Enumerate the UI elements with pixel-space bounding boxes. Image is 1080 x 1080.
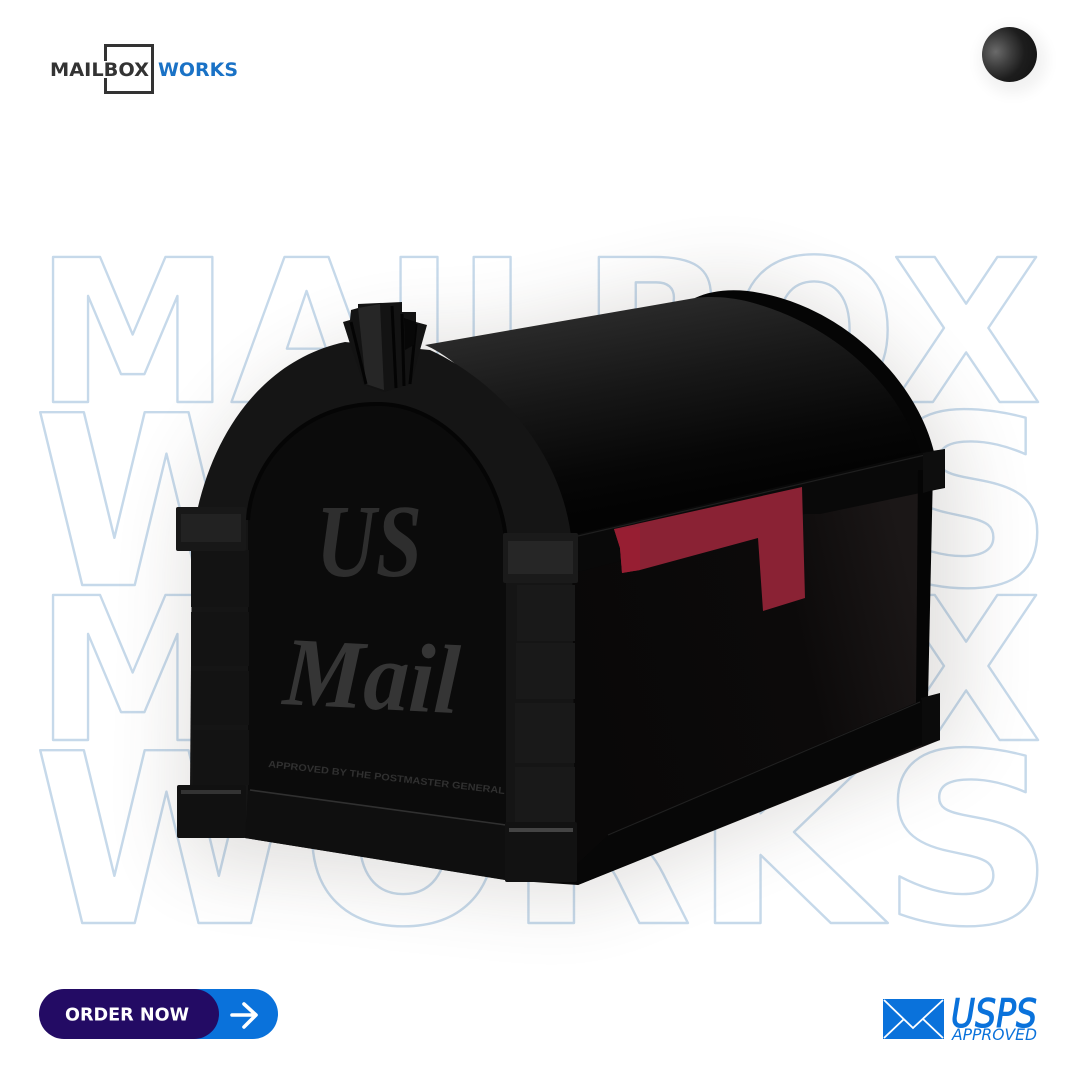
background outlined words: WORKS — [33, 703, 1055, 979]
usps badge — [883, 992, 1037, 1044]
right column bricks — [515, 585, 575, 822]
mailbox rear bottom block — [921, 693, 940, 746]
red flag — [614, 487, 805, 611]
order now button — [39, 989, 278, 1039]
background outlined words: MAILBOX — [35, 555, 1042, 787]
mailbox side upper rail — [578, 449, 945, 572]
usps wordmark: USPS — [951, 992, 1037, 1037]
embossed Mail text: Mail — [279, 618, 463, 735]
mailbox dome — [425, 291, 932, 545]
logo square — [106, 46, 152, 92]
left upper block — [176, 507, 246, 551]
background outlined words — [33, 217, 1055, 979]
logo wordmark: MAILBOX — [50, 60, 149, 81]
left column bricks — [191, 550, 249, 785]
embossed US text: US — [316, 484, 422, 599]
soft shadow behind mailbox — [180, 280, 960, 900]
mailbox side panel — [505, 458, 940, 885]
mailbox rear arch rim — [695, 290, 934, 457]
button label: ORDER NOW — [65, 1004, 189, 1026]
right lower block — [505, 822, 577, 882]
approved wordmark: APPROVED — [951, 1025, 1037, 1044]
mailbox front arch — [190, 342, 575, 880]
left lower block — [177, 785, 246, 838]
background outlined words: WORKS — [33, 365, 1055, 641]
art deco ornament — [343, 302, 427, 392]
sphere icon — [979, 26, 1047, 94]
icon: arrow — [232, 1004, 256, 1027]
mailbox front inner panel — [248, 404, 506, 825]
mailbox illustration — [176, 290, 945, 885]
front base ledge — [245, 790, 506, 880]
mailbox rear post — [916, 470, 933, 705]
logo wordmark accent: WORKS — [158, 60, 238, 81]
icon: envelope — [883, 999, 944, 1039]
button base — [150, 989, 278, 1039]
embossed approval line: APPROVED BY THE POSTMASTER GENERAL — [268, 759, 506, 797]
logo — [50, 46, 238, 92]
mailbox side lower rail — [560, 700, 922, 885]
mailbox rear top block — [923, 449, 945, 493]
right upper block — [503, 533, 578, 583]
button label pill — [39, 989, 219, 1039]
background outlined words: MAILBOX — [35, 217, 1042, 449]
